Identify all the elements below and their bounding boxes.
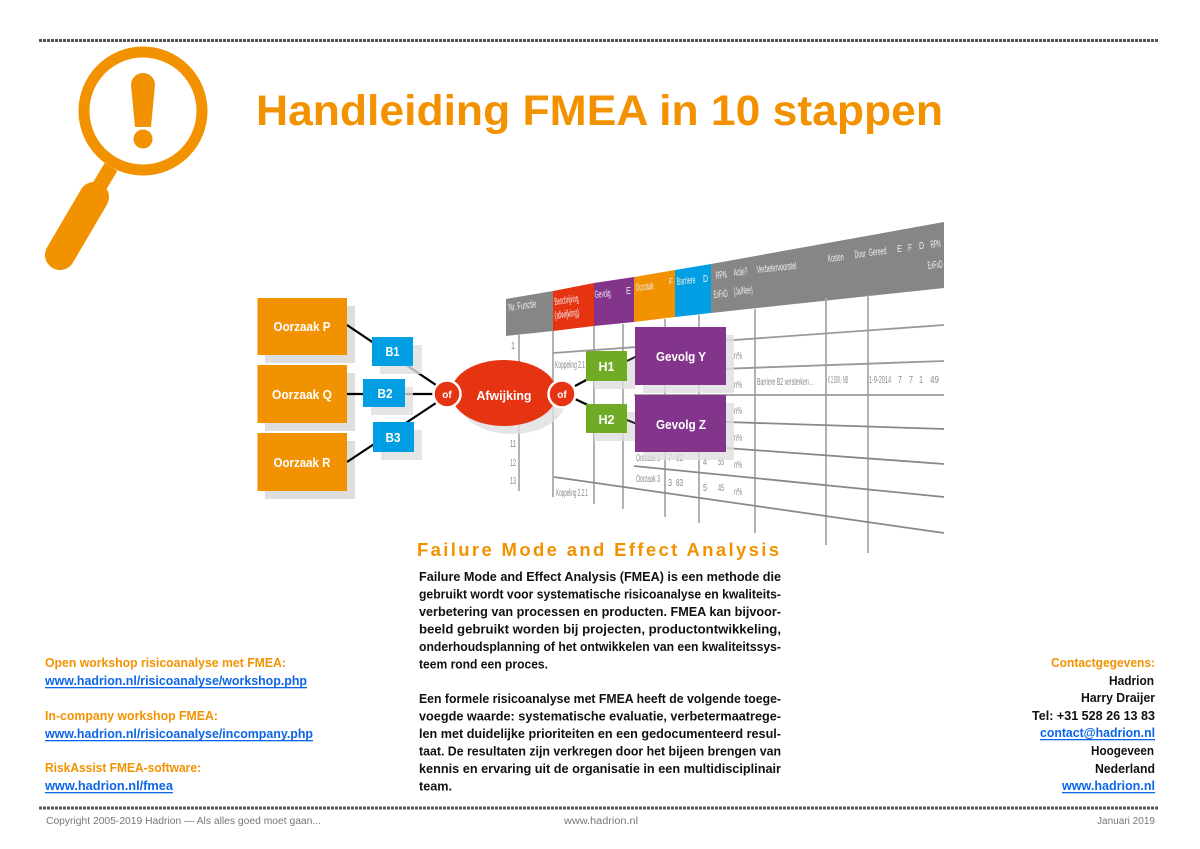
table cell text: n% [734,460,742,471]
table cell text: 82 [676,453,683,464]
table header band: Gereed [868,245,887,259]
table header band: F [908,242,912,254]
table cell text: 4 [703,457,707,468]
table header band: RPN [715,269,727,282]
table cell text: 7 [909,375,913,386]
table header band [506,222,944,336]
body text: Een formele risicoanalyse met FMEA heeft de volgende toege- [419,692,781,706]
table cell text: 7 [898,375,902,386]
table cell text: n% [734,380,742,391]
contact details: Hoogeveen [1091,744,1154,758]
table cell text: 83 [676,478,683,489]
cause and effect diagram [258,298,734,499]
table header band: Door [854,248,866,261]
gate: of left: of [442,390,452,401]
footer website: www.hadrion.nl [563,816,638,827]
control: H2: H2 [598,413,615,427]
cause: Oorzaak P: Oorzaak P [274,320,330,334]
cause: Oorzaak Q: Oorzaak Q [272,388,332,402]
table cell text: Oorzaak 3 [636,474,660,485]
body text: beeld gebruikt worden bij projecten, productontwikkeling, [419,622,781,636]
effect: Gevolg Z [635,395,726,452]
body text: teem rond een proces. [419,658,548,672]
footer date: Januari 2019 [1097,816,1155,827]
body text: voegde waarde: systematische evaluatie, verbetermaatrege- [419,710,781,724]
contact details: www.hadrion.nl [1061,779,1155,793]
table cell text: n% [734,406,742,417]
table cell text: 12 [510,458,516,469]
table cell text: 5 [703,483,707,494]
contact details: Harry Draijer [1081,691,1155,705]
effect: Gevolg Z: Gevolg Z [656,418,706,432]
table header band: Kosten [827,251,844,265]
control: H2 [586,404,627,433]
barrier: B3 [373,422,414,452]
table cell text: Koppeling 2.1 [555,360,585,371]
table cell text: 45 [718,483,724,494]
control: H1: H1 [598,360,615,374]
section heading: Failure Mode and Effect Analysis [417,539,779,560]
workshop and software links: www.hadrion.nl/risicoanalyse/workshop.php [44,674,307,688]
barrier: B1 [372,337,413,366]
contact details: Tel: +31 528 26 13 83 [1032,709,1155,723]
table header band: Verbetervoorstel [756,260,797,276]
table cell text: 1-9-2014 [869,375,891,386]
body text: onderhoudsplanning of het ontwikkelen van een kwaliteitssys- [419,640,781,654]
table header band: RPN [930,238,941,251]
cause: Oorzaak Q [258,365,347,423]
table cell text: 3 [668,478,672,489]
body text: taat. De resultaten zijn verkregen door het bijeen brengen van [419,744,781,758]
workshop and software links: Open workshop risicoanalyse met FMEA: [45,656,286,670]
table cell text: 55 [718,457,724,468]
table grid lines [519,295,944,553]
contact details: Contactgegevens: [1051,656,1155,670]
body text: verbetering van processen en producten. FMEA kan bijvoor- [419,605,781,619]
body text: kennis en ervaring uit de organisatie in een multidisciplinair [419,762,781,776]
table cell text: 13 [510,476,516,487]
table header band: Barriere [676,274,696,288]
table cell text: 1 [919,375,923,386]
workshop and software links: www.hadrion.nl/risicoanalyse/incompany.php [44,727,313,741]
table header band: Actie? [733,266,748,279]
body text [419,570,781,794]
table header band: Beschrijving [554,293,579,308]
table cell text: n% [734,487,742,498]
table header band: E [626,285,631,297]
contact details: Nederland [1095,762,1155,776]
cause: Oorzaak P [258,298,347,355]
workshop and software links: In-company workshop FMEA: [45,709,218,723]
control: H1 [586,351,627,381]
table cell text: Koppeling 2.2.1 [556,488,588,499]
table header band: F [669,276,673,288]
barrier: B2: B2 [378,387,393,401]
table cell text: 1 [511,341,515,352]
deviation: Afwijking: Afwijking [476,389,532,403]
table header band: D [703,273,708,285]
body text: gebruikt wordt voor systematische risicoanalyse en kwaliteits- [419,588,781,602]
barrier: B3: B3 [386,431,401,445]
effect: Gevolg Y [635,327,726,385]
cause: Oorzaak R: Oorzaak R [274,456,330,470]
title: Handleiding FMEA in 10 stappen [256,87,943,135]
table cell text: 11 [510,439,516,450]
body text: Failure Mode and Effect Analysis (FMEA) is een methode die [419,570,781,584]
gate: of right [548,380,576,408]
table header band: ExFxD [713,288,728,301]
contact details [1032,656,1155,793]
table header band: Nr. Functie [508,298,537,314]
table header band: (Ja/Nee) [733,284,753,298]
table cell text: Oorzaak 2 [636,453,660,464]
body text: team. [419,780,452,794]
deviation: Afwijking [451,360,557,426]
cause: Oorzaak R [258,433,347,491]
gate: of left [434,380,460,408]
table cell text: n% [734,351,742,362]
table header band: ExFxD [927,258,943,272]
footer copyright: Copyright 2005-2019 Hadrion — Als alles goed moet gaan... [46,816,321,827]
workshop and software links [44,656,313,793]
table header band: (afwijking) [554,307,580,322]
contact details: contact@hadrion.nl [1040,726,1155,740]
table header band: Oorzaak [635,280,655,294]
table cell text: 49 [930,375,939,386]
icon: magnifying glass with exclamation mark [60,52,202,255]
table header band: Gevolg [594,287,611,301]
table cell text: 7 [668,453,672,464]
workshop and software links: RiskAssist FMEA-software: [45,761,201,775]
barrier: B2 [363,379,405,407]
table header band: E [897,243,902,255]
table cell text [510,341,939,499]
table cell text: n% [734,433,742,444]
barrier: B1: B1 [386,345,400,359]
body text: len met duidelijke prioriteiten en een gedocumenteerd resul- [419,727,781,741]
table cell text: € 2.500,- NB [828,375,848,386]
gate: of right: of [557,390,567,401]
effect: Gevolg Y: Gevolg Y [656,350,707,364]
workshop and software links: www.hadrion.nl/fmea [44,779,174,793]
contact details: Hadrion [1109,674,1154,688]
table cell text: Barriere B2 versterken .. [757,377,813,388]
table header band: D [919,240,924,252]
FMEA worksheet table in perspective [506,222,944,553]
